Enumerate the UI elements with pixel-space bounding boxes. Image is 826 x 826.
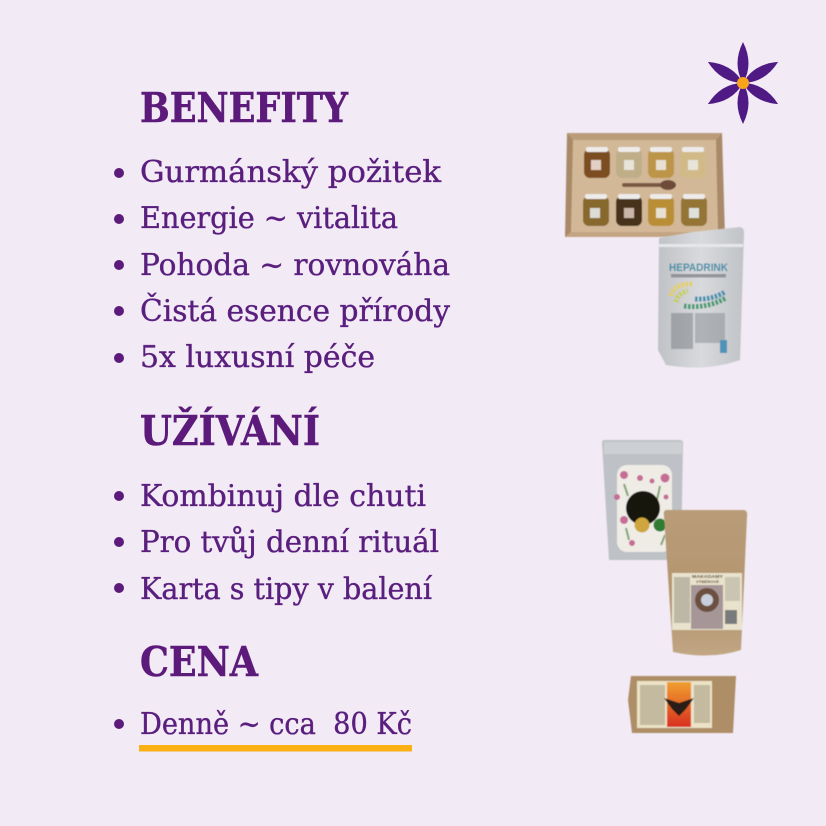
heading: cena: CENA xyxy=(140,638,259,686)
product: tea pouch xyxy=(602,440,683,560)
product: macadamia kraft bag: VÝBĚROVÉ xyxy=(696,579,719,584)
list: benefits: Energie ~ vitalita xyxy=(140,201,398,236)
heading: užívání: UŽÍVÁNÍ xyxy=(140,406,320,455)
jars top row xyxy=(584,147,706,178)
list: usage xyxy=(114,479,439,607)
list: usage: Pro tvůj denní rituál xyxy=(140,525,439,560)
jars bottom row xyxy=(583,194,707,226)
product: Hepadrink pouch xyxy=(658,227,744,368)
list: usage: Kombinuj dle chuti xyxy=(140,479,426,514)
product: macadamia kraft bag: MAKADAMY xyxy=(692,574,723,579)
product: gift box with jars xyxy=(565,133,725,237)
heading: benefity: BENEFITY xyxy=(140,84,349,132)
list: benefits: Čistá esence přírody xyxy=(140,293,451,329)
product: flat kraft packet xyxy=(628,676,736,733)
icon: purple flower xyxy=(705,42,781,124)
list: benefits: Gurmánský požitek xyxy=(140,155,442,190)
colour dot wheel xyxy=(671,284,726,307)
list: usage: Karta s tipy v balení xyxy=(140,572,432,607)
wooden spoon xyxy=(622,180,676,190)
price line: Denně ~ cca 80 Kč xyxy=(140,707,412,742)
product: Hepadrink pouch: HEPADRINK xyxy=(669,262,728,274)
list: benefits: Pohoda ~ rovnováha xyxy=(140,248,450,283)
list: benefits: 5x luxusní péče xyxy=(140,340,375,375)
list: benefits xyxy=(114,155,451,375)
product: macadamia kraft bag xyxy=(664,510,747,656)
